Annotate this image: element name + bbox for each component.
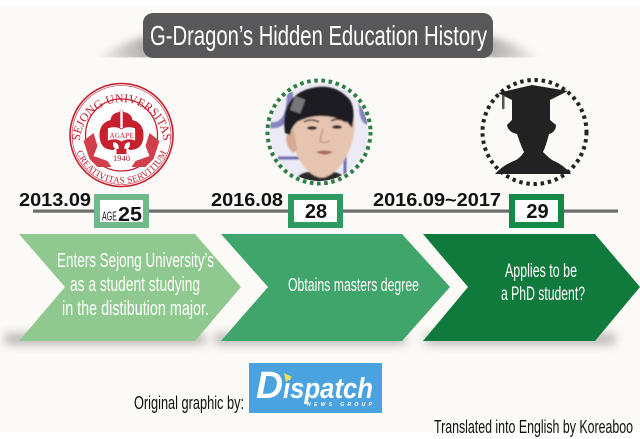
title: G-Dragon’s Hidden Education History (150, 20, 487, 51)
age badge 29: 29 (526, 201, 549, 223)
date: 2013.09: 2013.09 (19, 189, 91, 210)
date: 2016.09~2017: 2016.09~2017 (373, 189, 501, 210)
icon: Sejong University seal: 1940 (113, 153, 130, 163)
credit text: Original graphic by: (134, 393, 244, 413)
icon: Sejong University seal: SEJONG UNIVERSITAS (72, 94, 171, 140)
icon: Sejong University seal: AGAPE (110, 132, 134, 140)
panel: step 3 (423, 234, 640, 341)
panel: step 1 (19, 234, 241, 341)
panel: step 3: Applies to be (505, 261, 577, 282)
Dispatch logo (249, 363, 382, 413)
Dispatch logo: NEWS GROUP (307, 402, 373, 408)
panel: step 1: as a student studying (70, 273, 200, 296)
panel: step 1: in the distibution major. (62, 297, 209, 320)
panel: step 2 (221, 234, 450, 341)
arrow shadows (5, 334, 615, 344)
panel: step 2: Obtains masters degree (288, 274, 419, 295)
timeline line (33, 210, 618, 213)
panel: step 1: Enters Sejong University’s (57, 249, 214, 272)
panel: step 3: a PhD student? (501, 284, 585, 305)
age badge 29 (509, 194, 564, 228)
Dispatch logo: ispatch (283, 373, 373, 405)
icon: portrait photo (268, 80, 370, 185)
icon: Sejong University seal: CREATIVITAS SERVITIUM (77, 150, 166, 184)
age badge 25 (94, 194, 149, 228)
age badge 25: AGE (102, 210, 117, 224)
date: 2016.08: 2016.08 (211, 189, 283, 210)
icon: Sejong University seal (69, 82, 174, 188)
Dispatch logo: D (256, 365, 283, 407)
age badge 25: 25 (118, 204, 142, 226)
age badge 28: 28 (305, 201, 327, 223)
icon: graduate silhouette (482, 80, 586, 184)
age badge 28 (288, 194, 343, 228)
title (102, 13, 534, 58)
